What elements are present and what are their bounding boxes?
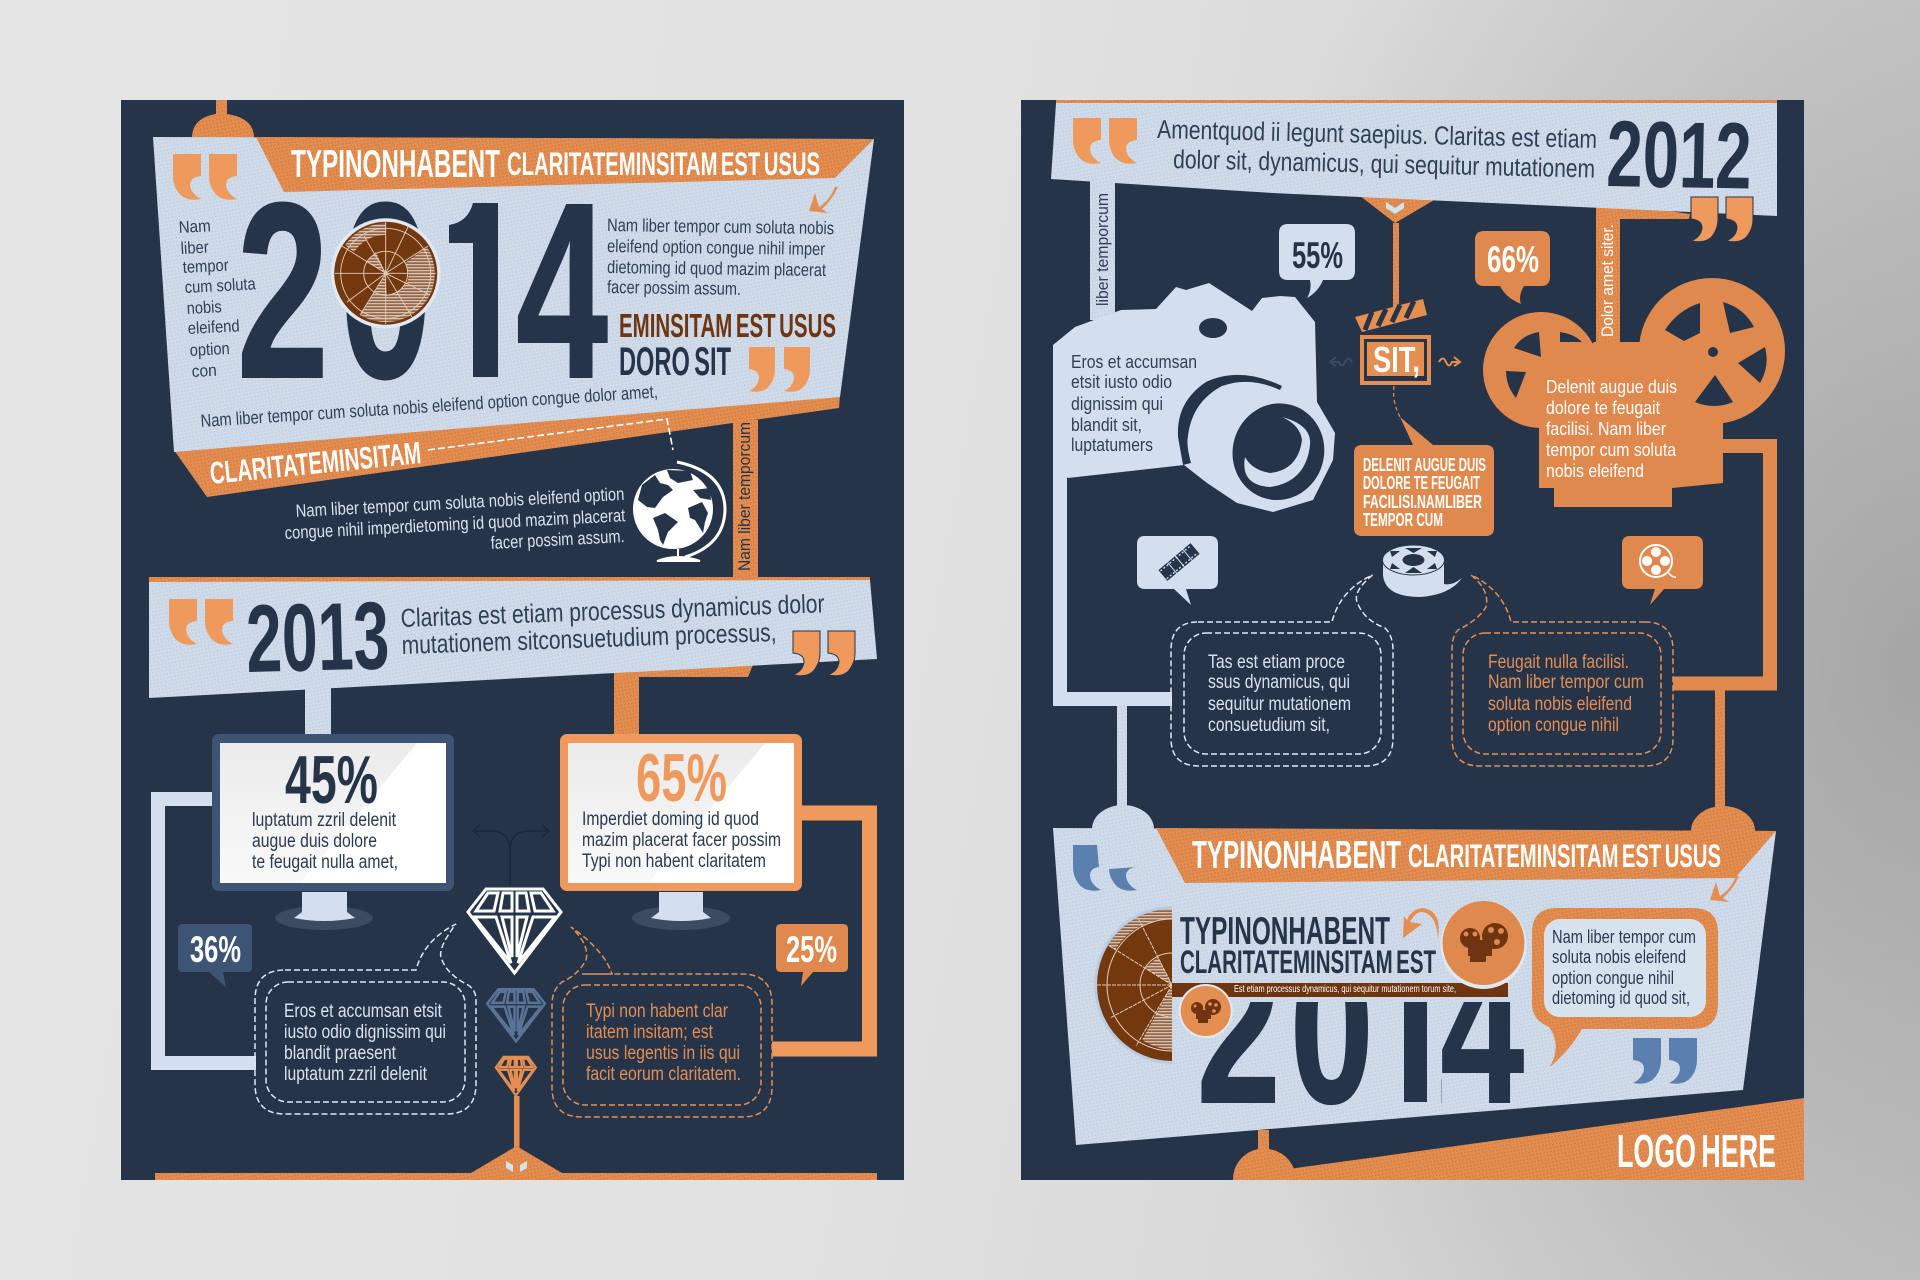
- statement: mutationem sitconsuetudium processus,: [401, 617, 777, 660]
- speech bubble: Nam liber tempor cum: [1552, 927, 1696, 947]
- orange lower ribbon: [174, 395, 840, 497]
- opening quote: [173, 154, 237, 200]
- year 2012: 2012: [1606, 101, 1752, 209]
- logo ribbon: LOGO HERE: [1617, 1125, 1776, 1177]
- icon: clapperboard SIT: SIT,: [1373, 339, 1420, 380]
- projector text: nobis eleifend: [1546, 461, 1644, 481]
- vertical bar: Nam liber temporcum: [733, 420, 758, 582]
- icon: film projector: [1483, 278, 1785, 507]
- dashed box: left: blandit praesent: [284, 1043, 397, 1064]
- camera text: Eros et accumsan: [1071, 352, 1197, 372]
- bubble: 36%: 36%: [190, 929, 241, 970]
- dashed leader: [1394, 386, 1400, 417]
- squiggle arrows: [1439, 357, 1460, 366]
- connector: right monitor to box: [772, 813, 870, 1049]
- connector bar from 2013: [305, 688, 331, 734]
- left column text: Nam: [178, 216, 211, 237]
- camera text: etsit iusto odio: [1071, 372, 1172, 392]
- description: te feugait nulla amet,: [252, 852, 398, 873]
- camera text: luptatumers: [1071, 435, 1153, 455]
- orange note: DOLORE TE FEUGAIT: [1363, 473, 1480, 493]
- poster: right: [1021, 100, 1804, 1180]
- icon: small diamond: [496, 1057, 536, 1096]
- dashed box: right: option congue nihil: [1488, 715, 1619, 736]
- camera text: blandit sit,: [1071, 415, 1142, 435]
- stem and base: [155, 1096, 877, 1180]
- globe caption: [284, 484, 626, 553]
- title block: CLARITATEMINSITAM EST: [1180, 944, 1436, 980]
- statement: [402, 594, 824, 654]
- dashed box: left: [1171, 575, 1393, 766]
- dashed box: left: sequitur mutationem: [1208, 694, 1351, 715]
- arrow: forked: [473, 825, 549, 886]
- vertical bar: Dolor amet siter: Dolor amet siter.: [1598, 224, 1617, 337]
- monitor: 45%: [212, 734, 454, 930]
- panel: 2014 header: [153, 137, 874, 497]
- orange top ribbon: [256, 137, 874, 192]
- value: 45%: [285, 742, 378, 818]
- icon: camera: [1053, 283, 1335, 512]
- projector text: Delenit augue duis: [1546, 377, 1677, 397]
- year 2014: 2014: [1197, 910, 1524, 1148]
- closing quote: [793, 631, 855, 676]
- right frame connector: [1673, 446, 1770, 684]
- orange connector from 2013: [614, 660, 755, 734]
- orange top ribbon: TYPINONHABENT: [291, 143, 500, 186]
- dashed box: right: Nam liber tempor cum: [1488, 672, 1644, 693]
- arrow: [809, 187, 838, 213]
- icon: 3D film reel: [1382, 545, 1462, 597]
- description: mazim placerat facer possim: [582, 830, 781, 851]
- bell right: [1691, 806, 1755, 831]
- orange ribbon: CLARITATEMINSITAM EST USUS: [1408, 838, 1721, 874]
- statement: [1157, 114, 1597, 184]
- lamp connector top: [192, 100, 254, 138]
- caption: Nam liber tempor cum soluta nobis eleifend option congue dolor amet,: [200, 381, 658, 431]
- pie badge: [331, 218, 441, 328]
- left column text: eleifend: [187, 316, 240, 338]
- description: [582, 809, 781, 872]
- bubble: 25%: [776, 924, 848, 986]
- description: Typi non habent claritatem: [582, 851, 766, 872]
- orange note: TEMPOR CUM: [1363, 510, 1443, 530]
- funnel connector: [1355, 192, 1441, 308]
- icon: medium diamond: [487, 989, 545, 1041]
- statement: Claritas est etiam processus dynamicus dolor: [400, 588, 825, 633]
- left column text: cum soluta: [184, 274, 257, 297]
- poster: left: [121, 100, 904, 1180]
- subheading dark: DORO SIT: [619, 340, 731, 384]
- vertical bar: Dolor amet siter: [1596, 200, 1690, 345]
- title block: TYPINONHABENT: [1180, 910, 1390, 953]
- globe caption: congue nihil imperdietoming id quod mazim placerat: [284, 505, 626, 543]
- projector text: dolore te feugait: [1546, 398, 1660, 418]
- dashed box: right: usus legentis in iis qui: [586, 1043, 740, 1064]
- description: luptatum zzril delenit: [252, 810, 397, 831]
- orange top ribbon: CLARITATEMINSITAM EST USUS: [507, 146, 820, 182]
- title block: [1172, 905, 1436, 983]
- vertical bar: liber temporcum: [1090, 175, 1115, 320]
- dashed box: left: ssus dynamicus, qui: [1208, 672, 1350, 693]
- dashed box: left: consuetudium sit,: [1208, 715, 1330, 736]
- dashed box: right: Feugait nulla facilisi.: [1488, 652, 1629, 673]
- light banner: [149, 580, 877, 698]
- arrow: [1710, 876, 1739, 902]
- opening quote: [1073, 845, 1137, 891]
- icon: large diamond: [468, 889, 561, 973]
- right text block: eleifend option congue nihil imper: [607, 236, 825, 259]
- ribbon label: CLARITATEMINSITAM: [208, 435, 423, 491]
- globe caption: facer possim assum.: [490, 526, 625, 553]
- closing quote: [1691, 197, 1753, 242]
- closing quote: [1633, 1038, 1697, 1084]
- description: [252, 810, 398, 873]
- opening quote: [169, 599, 233, 645]
- bubble: 25%: 25%: [786, 929, 837, 970]
- orange note: DELENIT AUGUE DUIS: [1363, 455, 1486, 475]
- right text block: dietoming id quod mazim placerat: [607, 257, 826, 280]
- dashed box: left: [255, 924, 476, 1114]
- bubble: 66%: 66%: [1487, 239, 1539, 280]
- opening quote: [1073, 118, 1137, 164]
- camera text: dignissim qui: [1071, 394, 1163, 414]
- right text block: Nam liber tempor cum soluta nobis: [607, 215, 834, 238]
- squiggle dark: [1330, 357, 1352, 366]
- description: Imperdiet doming id quod: [582, 809, 759, 830]
- orange note: FACILISI.NAMLIBER: [1363, 492, 1482, 512]
- statement: dolor sit, dynamicus, qui sequitur mutationem: [1173, 144, 1595, 184]
- speech bubble: option congue nihil: [1552, 968, 1674, 988]
- light panel: [1053, 828, 1776, 1145]
- bell left: [1092, 805, 1154, 829]
- bubble: film strip: [1137, 536, 1218, 605]
- closing quote: [749, 347, 810, 392]
- statement: Amentquod ii legunt saepius. Claritas est etiam: [1157, 114, 1597, 154]
- year 2013: 2013: [245, 582, 391, 693]
- bubble: 55%: [1279, 224, 1355, 298]
- description: augue duis dolore: [252, 831, 377, 852]
- speech bubble: soluta nobis eleifend: [1552, 947, 1686, 967]
- vertical bar: Nam liber temporcum: Nam liber temporcum: [735, 422, 754, 571]
- large projector badge: [1440, 901, 1526, 989]
- orange note: [1354, 417, 1494, 536]
- left column text: nobis: [186, 297, 222, 318]
- connector: left monitor to box: [158, 799, 256, 1063]
- dashed leader: [428, 419, 673, 450]
- bubble: 55%: 55%: [1292, 235, 1343, 276]
- projector text: facilisi. Nam liber: [1546, 419, 1666, 439]
- globe icon: [633, 462, 725, 561]
- dashed box: right: itatem insitam; est: [586, 1022, 714, 1043]
- bubble: 66%: [1475, 231, 1550, 304]
- globe caption: Nam liber tempor cum soluta nobis eleifend option: [295, 484, 625, 521]
- left column text: [178, 216, 257, 381]
- light panel: [153, 137, 874, 452]
- year 2014: [242, 202, 608, 380]
- bubble: 36%: [178, 924, 252, 987]
- left column text: tempor: [182, 256, 229, 277]
- dashed box: right: [552, 927, 772, 1117]
- projector text: tempor cum soluta: [1546, 440, 1677, 460]
- left column text: option: [189, 339, 230, 360]
- small projector badge: [1179, 984, 1233, 1038]
- dashed box: left: iusto odio dignissim qui: [284, 1022, 446, 1043]
- value: 65%: [636, 740, 727, 816]
- dashed box: right: soluta nobis eleifend: [1488, 694, 1632, 715]
- dashed box: left: Eros et accumsan etsit: [284, 1001, 443, 1022]
- subheading: EMINSITAM EST USUS: [619, 307, 836, 344]
- right text block: [607, 215, 834, 299]
- curved arrow: [1403, 908, 1439, 938]
- orange ribbon: TYPINONHABENT: [1192, 834, 1401, 877]
- brown strip: [1172, 983, 1508, 997]
- left column text: con: [191, 361, 217, 381]
- dashed box: left: Tas est etiam proce: [1208, 652, 1345, 673]
- year 2014: 2014: [237, 150, 608, 430]
- left stem: [1117, 705, 1127, 810]
- vertical bar: liber temporcum: liber temporcum: [1093, 193, 1112, 306]
- bubble: reel: [1622, 536, 1703, 605]
- logo ribbon: [1232, 1098, 1804, 1180]
- light banner: [1051, 103, 1777, 216]
- icon: clapperboard SIT: [1355, 299, 1431, 385]
- monitor: 65%: [560, 734, 802, 930]
- panel: 2014 footer: [1053, 828, 1776, 1148]
- right stem: [1715, 690, 1725, 808]
- orange ribbon: [1156, 828, 1776, 883]
- panel: 2012 header: [1051, 100, 1777, 242]
- brown strip: Est etiam processus dynamicus, qui sequitur mutationem torum site,: [1234, 984, 1456, 995]
- left column text: liber: [180, 238, 209, 258]
- dashed box: right: Typi non habent clar: [586, 1001, 729, 1022]
- dashed box: left: luptatum zzril delenit: [284, 1064, 428, 1085]
- dashed box: right: facit eorum claritatem.: [586, 1064, 741, 1085]
- speech bubble: dietoming id quod sit,: [1552, 988, 1690, 1008]
- camera text: [1071, 352, 1197, 455]
- dashed box: right: [1452, 575, 1673, 766]
- half pie badge: [1094, 906, 1250, 1064]
- panel: 2013 header: [149, 577, 877, 698]
- left frame connector: [1060, 460, 1172, 699]
- speech bubble: [1532, 908, 1718, 1067]
- right text block: facer possim assum.: [607, 277, 741, 299]
- projector text: [1546, 377, 1677, 481]
